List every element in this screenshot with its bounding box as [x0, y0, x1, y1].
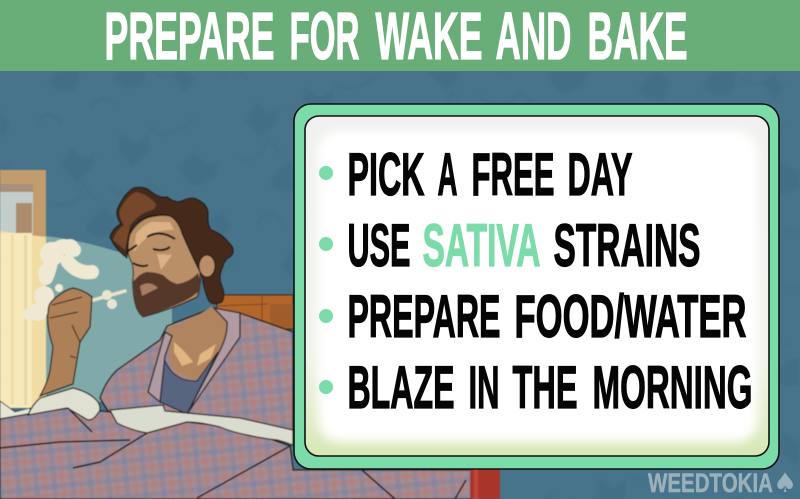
tip 1: FREE [472, 141, 554, 208]
title: AND [496, 0, 572, 74]
robe [100, 308, 293, 432]
hair [110, 187, 233, 304]
tip 4: THE [512, 354, 578, 421]
tip 1: A [438, 141, 458, 208]
tip 2: SATIVA [422, 212, 540, 279]
tip 1: PICK [348, 141, 424, 208]
sheet fold [110, 405, 293, 445]
left bedding [0, 401, 30, 420]
tip 4: IN [468, 354, 500, 421]
red bed post [470, 465, 500, 499]
lower lip [140, 283, 158, 296]
blanket [0, 408, 478, 499]
tip 4 [348, 354, 752, 421]
tip 1: DAY [568, 141, 632, 208]
face highlights [134, 222, 174, 270]
smoke cloud [23, 239, 117, 321]
title: PREPARE [104, 0, 274, 74]
window [0, 170, 46, 408]
ear [199, 255, 215, 277]
tip 4: BLAZE [348, 354, 454, 421]
icon: spade: ♠ [773, 468, 797, 499]
title [104, 0, 688, 74]
arm and hand [40, 288, 92, 396]
panel: tips card [294, 104, 779, 469]
light beam on wall [46, 236, 172, 410]
title: WAKE [376, 0, 482, 74]
illustration: man smoking in bed [0, 170, 500, 499]
face [128, 215, 200, 317]
card inner panel [305, 116, 769, 456]
sheet lump [28, 388, 100, 420]
panel: title banner [0, 0, 800, 74]
fingers [50, 297, 82, 358]
brow, eye and nose lines [128, 233, 175, 266]
tip 2 [348, 212, 700, 279]
blanket folds [0, 408, 466, 499]
title: BAKE [588, 0, 688, 74]
neck highlights [174, 342, 216, 366]
card white glow [318, 130, 758, 442]
headboard [217, 295, 293, 329]
bullet 1 [319, 166, 333, 180]
tip 2: USE [348, 212, 410, 279]
robe lapels [148, 308, 240, 414]
neck [167, 306, 227, 381]
joint [90, 291, 125, 301]
beard [133, 272, 200, 317]
title: FOR [290, 0, 360, 74]
t-shirt [160, 352, 218, 414]
bullet 2 [319, 237, 333, 251]
tip 3: PREPARE [348, 283, 500, 350]
lighter hair strands [113, 192, 156, 250]
tip 1 [348, 141, 632, 208]
bullet 4 [319, 380, 333, 394]
bullet 3 [319, 309, 333, 323]
